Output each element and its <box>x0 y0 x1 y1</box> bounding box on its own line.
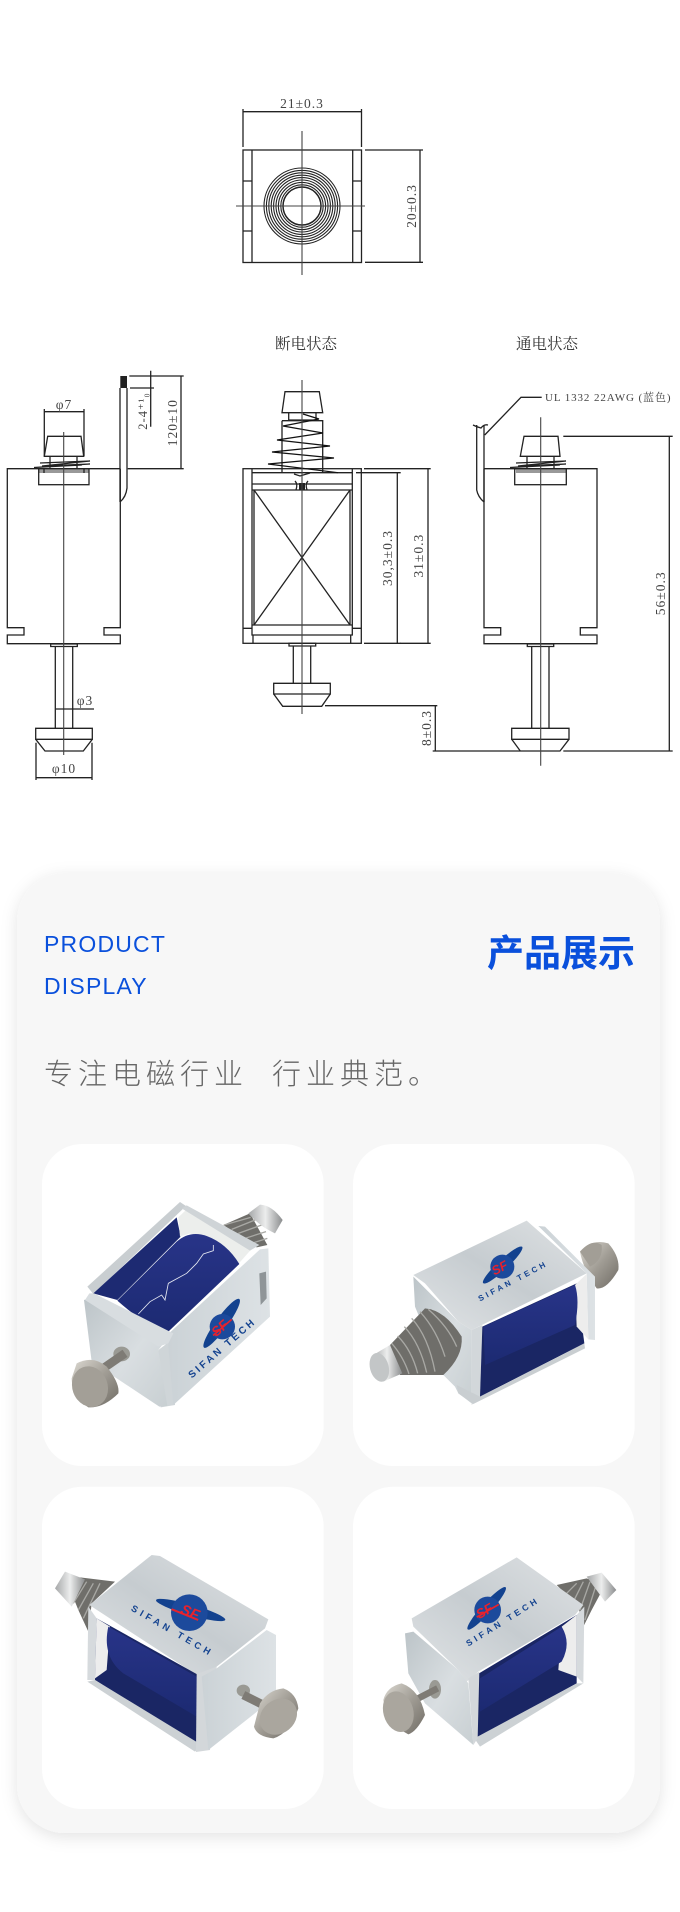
logo 3: SIFAN TECH <box>129 1603 213 1657</box>
left wire <box>120 376 127 502</box>
top view coil rings <box>264 168 340 244</box>
section coil cross <box>254 490 350 625</box>
section shaft and head <box>274 643 330 706</box>
dimension 8 <box>325 706 520 751</box>
dimension phi 10: φ10 <box>52 761 76 776</box>
dimension 8: 8±0.3 <box>419 710 434 746</box>
logo 1: SF <box>208 1316 232 1340</box>
logo 4: SIFAN TECH <box>464 1597 539 1648</box>
drawing: top view <box>236 96 423 275</box>
drawing: section view off state <box>243 380 520 751</box>
left centre line <box>63 432 65 755</box>
dimension 2-4 <box>129 371 184 430</box>
product photo 3 <box>55 1555 304 1752</box>
english heading <box>44 931 166 999</box>
leader label UL 1332: UL 1332 22AWG (蓝色) <box>545 390 671 404</box>
tagline: 专注电磁行业 <box>44 1058 248 1091</box>
dimension 30.3: 30,3±0.3 <box>380 530 395 586</box>
photo card 4 <box>353 1487 635 1809</box>
section centre line <box>301 380 303 714</box>
dimension phi 3 <box>55 693 94 709</box>
heading: power off state: 断电状态 <box>275 335 337 353</box>
right wire <box>473 425 488 502</box>
logo 2: SF <box>489 1258 510 1278</box>
right centre line <box>540 417 542 766</box>
drawing: side view on state <box>473 390 673 766</box>
english heading: DISPLAY <box>44 973 148 999</box>
logo 3: SF <box>178 1602 202 1624</box>
dimension 31: 31±0.3 <box>411 534 426 578</box>
photo card 1 <box>42 1144 324 1466</box>
dimension phi 10 <box>36 743 92 780</box>
top view centre lines <box>236 131 365 275</box>
panel: product display <box>17 873 660 1833</box>
heading: power on state: 通电状态 <box>516 335 578 353</box>
dimension 20±0.3 <box>365 150 423 262</box>
left body <box>7 469 120 644</box>
photo card 2 <box>353 1144 635 1466</box>
logo 1: SIFAN TECH <box>187 1318 257 1381</box>
dimension 31 <box>364 469 431 643</box>
left cap and spring <box>34 436 90 468</box>
right collar <box>515 469 566 485</box>
leader label UL 1332 <box>485 390 671 435</box>
tagline <box>44 1058 442 1091</box>
chinese heading: 产品展示 <box>487 933 635 974</box>
dimension phi 3: φ3 <box>77 693 93 708</box>
dimension 56: 56±0.3 <box>653 571 668 615</box>
section plunger cap <box>282 392 323 473</box>
top view frame <box>243 150 362 262</box>
logo 2: SIFAN TECH <box>477 1260 547 1303</box>
dimension phi 7: φ7 <box>56 397 72 412</box>
section spring <box>268 414 338 473</box>
right body <box>484 469 597 644</box>
product photo 4 <box>378 1557 616 1747</box>
dimension 21±0.3: 21±0.3 <box>280 96 324 111</box>
photo card 3 <box>42 1487 324 1809</box>
drawing: side view left <box>7 371 184 780</box>
logo 4: SF <box>473 1600 496 1622</box>
right shaft and head <box>512 644 569 751</box>
dimension 2-4: 2-4⁺¹₀ <box>136 392 150 430</box>
dimension 20±0.3: 20±0.3 <box>404 184 419 228</box>
dimension 120±10 <box>128 376 184 469</box>
english heading: PRODUCT <box>44 931 166 957</box>
dimension 56 <box>563 436 673 751</box>
left shaft and head <box>36 644 92 751</box>
product photo 1 <box>66 1202 283 1412</box>
section armature detail <box>294 473 310 490</box>
product photo 2 <box>367 1221 619 1405</box>
tagline: 行业典范。 <box>272 1058 442 1091</box>
dimension 30.3 <box>356 473 401 643</box>
dimension 21±0.3 <box>243 96 362 147</box>
left collar <box>39 468 89 485</box>
right cap and spring <box>510 436 566 468</box>
section outer frame <box>243 469 361 643</box>
dimension 120±10: 120±10 <box>165 399 180 446</box>
panel background <box>17 873 660 1833</box>
dimension phi 7 <box>44 397 84 456</box>
